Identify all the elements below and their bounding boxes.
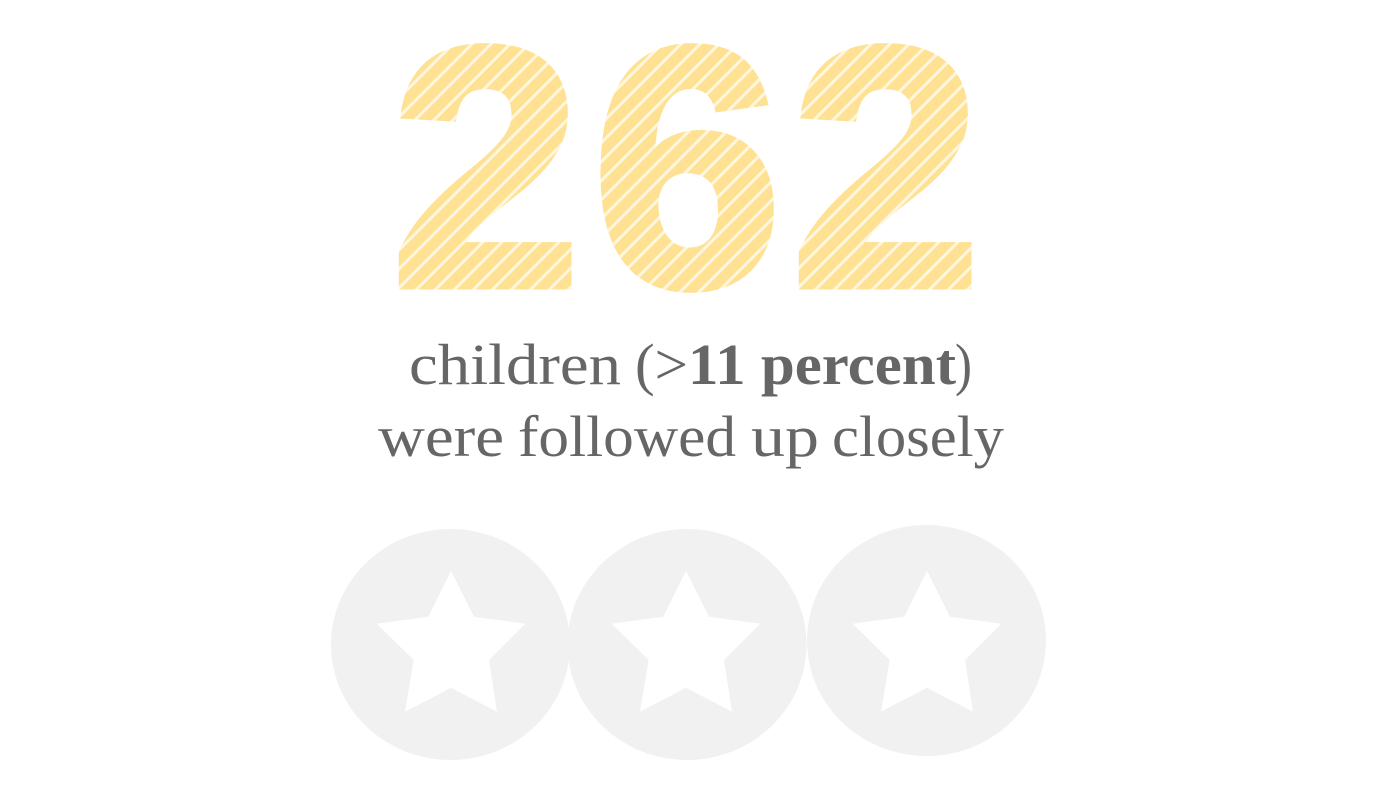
caption line 1: children (409, 332, 621, 397)
caption line 1 (409, 332, 972, 397)
star badges row (331, 525, 1046, 760)
caption text (378, 332, 1004, 469)
caption line 2: closely (832, 404, 1004, 469)
icon: star badge 1 (331, 529, 570, 760)
caption line 1: (> (635, 332, 688, 397)
caption line 1: ) (955, 332, 972, 397)
icon: star badge 2 (568, 529, 806, 760)
icon: star badge 3 (807, 525, 1046, 756)
big number: 262 (392, 0, 981, 358)
caption line 2: up (751, 404, 819, 469)
caption line 2 (378, 404, 1004, 469)
caption line 1: 11 percent (688, 332, 957, 397)
caption line 2: were (378, 404, 504, 469)
caption line 2: followed (518, 404, 736, 469)
